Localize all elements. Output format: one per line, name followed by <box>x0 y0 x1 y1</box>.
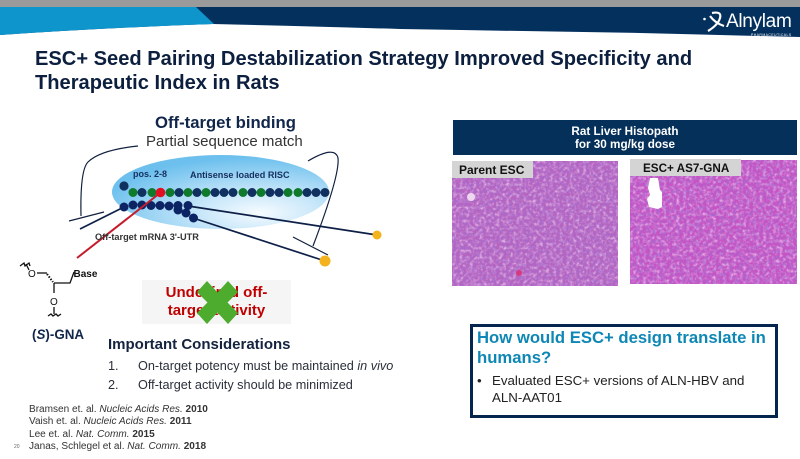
icon: green cross <box>197 281 238 324</box>
references: Janas, Schlegel et al. Nat. Comm. 2018 <box>29 441 206 452</box>
histopath banner: for 30 mg/kg dose <box>575 138 675 151</box>
important considerations <box>108 336 393 392</box>
image: parent ESC: Parent ESC <box>459 163 525 177</box>
list: 1. <box>108 359 119 373</box>
subheading: partial sequence match: Partial sequence match <box>146 133 303 150</box>
callout bullet <box>477 373 744 404</box>
panel: off-target binding diagram <box>20 145 382 317</box>
header banner <box>0 0 800 37</box>
histopath banner: Rat Liver Histopath <box>571 124 679 138</box>
panel: off-target binding diagram: Base <box>74 269 98 280</box>
protein loop lines <box>69 146 338 255</box>
title <box>35 48 692 94</box>
histopath banner <box>453 120 797 155</box>
title: ESC+ Seed Pairing Destabilization Strategy Improved Specificity and <box>35 48 692 70</box>
RISC ellipse <box>112 155 329 229</box>
panel: off-target binding diagram: O <box>50 297 58 308</box>
list: On-target potency must be maintained in vivo <box>138 359 393 373</box>
gold end caps <box>320 230 382 266</box>
references: Vaish et. al. Nucleic Acids Res. 2011 <box>29 416 192 427</box>
references: Bramsen et. al. Nucleic Acids Res. 2010 <box>29 404 208 415</box>
diagram labels: Off-target mRNA 3'-UTR <box>95 232 199 242</box>
panel: off-target binding diagram: O <box>28 269 36 280</box>
list: 2. <box>108 378 119 392</box>
diagram labels: Antisense loaded RISC <box>190 170 290 180</box>
page number: 20 <box>14 444 20 450</box>
list <box>108 359 393 392</box>
references <box>29 404 208 452</box>
callout: undesired off-target activity <box>142 280 291 324</box>
callout: undesired off-target activity: Undesired off- <box>166 284 267 301</box>
callout: undesired off-target activity: target activity <box>168 302 265 319</box>
image: ESC+ AS7-GNA: ESC+ AS7-GNA <box>643 162 730 175</box>
callout bullet: • <box>477 373 482 388</box>
heading: Important Considerations <box>108 336 291 353</box>
mRNA beads <box>120 200 198 222</box>
label: (S)-GNA: (S)-GNA <box>32 327 84 342</box>
image: ESC+ AS7-GNA <box>630 159 797 284</box>
diagram labels: pos. 2-8 <box>133 169 167 179</box>
diagram labels <box>95 169 290 242</box>
callout box: translation to humans <box>470 324 778 418</box>
histology images <box>452 159 797 286</box>
(S)-GNA structure <box>20 263 74 316</box>
callout bullet: ALN-AAT01 <box>492 390 562 404</box>
logo: Alnylam: PHARMACEUTICALS <box>751 33 792 37</box>
guide strand beads <box>119 181 330 197</box>
references: Lee et. al. Nat. Comm. 2015 <box>29 429 155 440</box>
callout heading: How would ESC+ design translate in <box>477 328 766 347</box>
callout heading: humans? <box>477 348 551 367</box>
off-target mRNA strand <box>80 206 377 261</box>
heading: off-target binding: Off-target binding <box>155 113 296 132</box>
GNA pointer line and red bead <box>77 188 165 258</box>
callout heading <box>477 328 766 367</box>
logo: Alnylam: Alnylam <box>726 11 791 32</box>
callout bullet: Evaluated ESC+ versions of ALN-HBV and <box>492 373 744 388</box>
list: Off-target activity should be minimized <box>138 378 353 392</box>
title: Therapeutic Index in Rats <box>35 72 280 94</box>
image: parent ESC <box>452 161 618 286</box>
logo: Alnylam <box>703 11 792 37</box>
